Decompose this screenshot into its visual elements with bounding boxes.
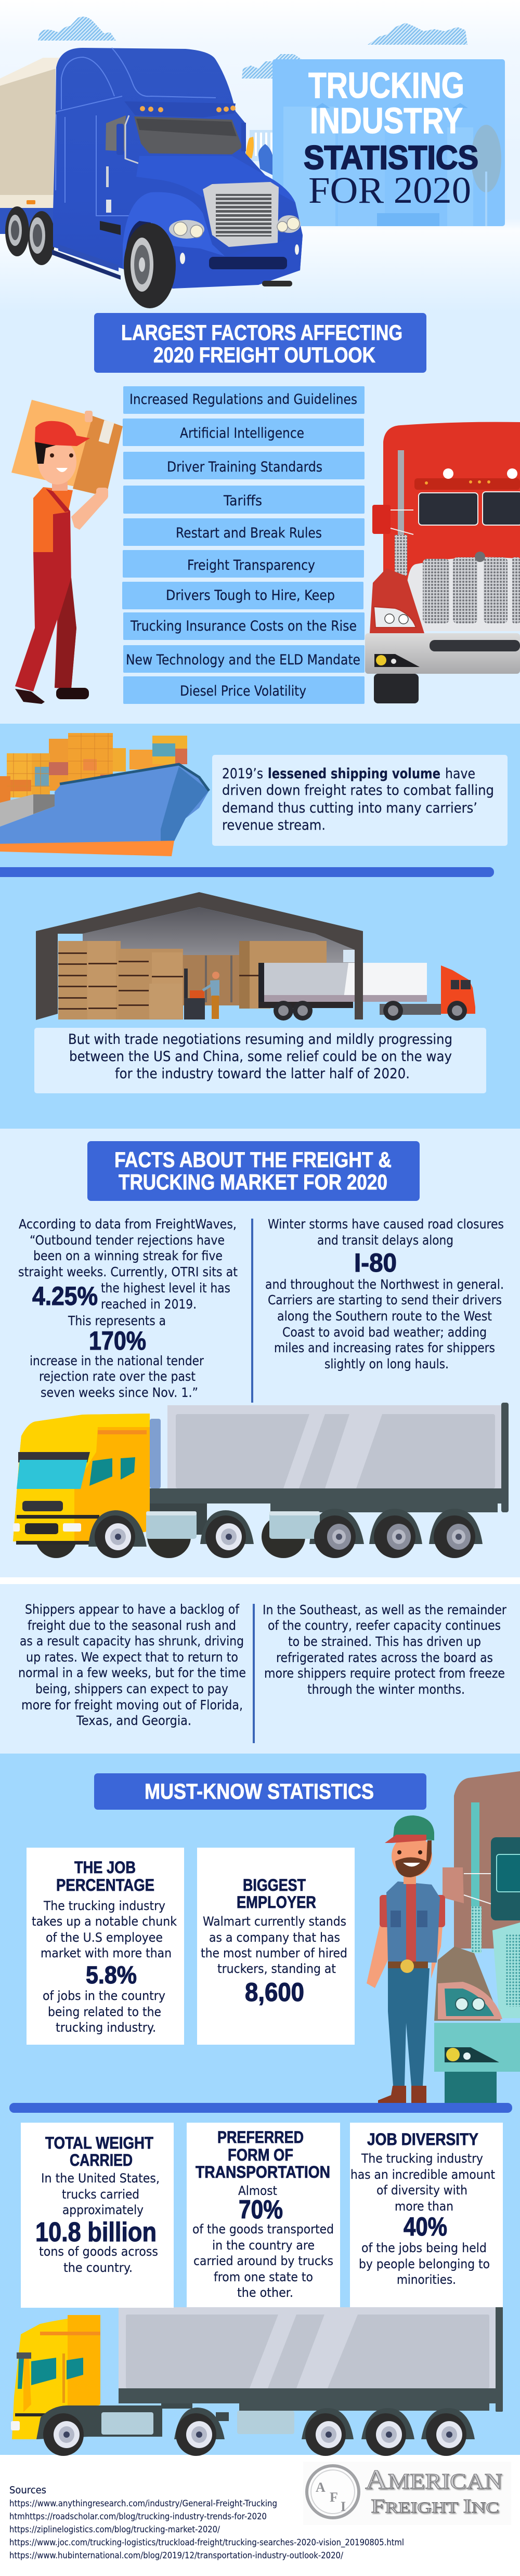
text box: shipping volume: 2019’s	[222, 766, 263, 782]
right column text: southeast: refrigerated rates across the board as	[276, 1650, 493, 1665]
right column text	[265, 1217, 504, 1371]
divider bar	[0, 867, 494, 877]
panel: sources	[9, 2485, 404, 2561]
left column text: 4.25%	[32, 1282, 98, 1311]
list of factors: Trucking Insurance Costs on the Rise	[130, 618, 357, 634]
right column text: along the Southern route to the West	[277, 1309, 492, 1324]
card: biggest employer: BIGGEST	[243, 1876, 306, 1894]
logo: American Freight Inc: FREIGHT INC	[371, 2495, 499, 2517]
trailer	[119, 2305, 503, 2412]
left column text: shippers: Texas, and Georgia.	[76, 1713, 191, 1728]
panel: facts about the market	[13, 1141, 509, 1743]
panel: must-know statistics	[9, 1771, 520, 2456]
card: total weight carried: 10.8 billion	[35, 2217, 157, 2247]
card: biggest employer: 8,600	[245, 1978, 304, 2007]
rear wheels	[5, 206, 55, 265]
card: job diversity: by people belonging to	[359, 2257, 490, 2271]
cab	[11, 2315, 100, 2439]
forklift	[184, 969, 205, 1019]
left column text: shippers: up rates. We expect that to return to	[26, 1650, 238, 1665]
list of factors: Restart and Break Rules	[176, 525, 322, 541]
right column text: Coast to avoid bad weather; adding	[282, 1325, 487, 1340]
left column text: straight weeks. Currently, OTRI sits at	[18, 1264, 238, 1279]
illustration: teal truck	[434, 1771, 520, 2104]
card: preferred form of transportation: the other.	[237, 2285, 293, 2300]
card: preferred form of transportation: PREFERRED	[217, 2128, 304, 2147]
left column text: shippers: more for freight moving out of Florida,	[21, 1697, 243, 1712]
panel: title box	[272, 59, 505, 226]
text box: shipping volume: revenue stream.	[222, 817, 326, 833]
logo ring: I	[341, 2499, 346, 2514]
text box: shipping volume: demand thus cutting into many carriers’	[222, 800, 477, 816]
card: total weight carried: the country.	[63, 2260, 133, 2275]
heading banner: LARGEST FACTORS AFFECTING	[121, 320, 402, 345]
illustration: blue semi truck	[0, 48, 303, 308]
card: biggest employer	[197, 1848, 355, 2045]
list of factors	[122, 386, 365, 704]
card: the job percentage: THE JOB	[74, 1858, 136, 1877]
left column text: reached in 2019.	[101, 1297, 197, 1312]
card: job diversity: The trucking industry	[361, 2151, 483, 2166]
logo: American Freight Inc: AMERICAN	[365, 2465, 502, 2495]
delivery truck	[258, 949, 475, 1021]
panel: sources: https://www.joc.com/trucking-logistics/truckload-freight/trucking-searches-2020-vision_20190805.html	[9, 2538, 404, 2548]
card: total weight carried: TOTAL WEIGHT	[45, 2134, 153, 2152]
card: preferred form of transportation: FORM OF	[228, 2146, 293, 2164]
illustration: warehouse and truck	[36, 892, 475, 1021]
right column text: southeast	[263, 1602, 507, 1697]
card: the job percentage: of jobs in the country	[43, 1989, 165, 2003]
left column text: 170%	[89, 1326, 146, 1355]
panel: largest factors	[11, 313, 520, 704]
card: preferred form of transportation: Almost	[238, 2183, 277, 2198]
left column text	[18, 1217, 238, 1400]
front wheel	[124, 221, 176, 308]
text box: shipping volume: have	[445, 766, 475, 782]
card: preferred form of transportation: in the country are	[212, 2238, 315, 2253]
panel: sources: https://ziplinelogistics.com/blog/trucking-market-2020/	[9, 2525, 220, 2535]
right column text: southeast: through the winter months.	[307, 1682, 465, 1697]
right column text: southeast: to be strained. This has driven up	[288, 1634, 481, 1649]
card: the job percentage: trucking industry.	[56, 2020, 156, 2035]
panel: sources: https://www.anythingresearch.com/industry/General-Freight-Trucking	[9, 2499, 277, 2509]
list of factors: Driver Training Standards	[167, 459, 322, 475]
illustration: faint city behind title	[245, 130, 281, 177]
text box: trade negotiations	[34, 1028, 486, 1093]
left column text: been on a winning streak for five	[33, 1248, 223, 1263]
card: the job percentage: PERCENTAGE	[56, 1876, 154, 1894]
card: biggest employer: the most number of hired	[201, 1946, 347, 1960]
card: job diversity: JOB DIVERSITY	[367, 2130, 478, 2149]
card: total weight carried: In the United States,	[41, 2171, 160, 2186]
card: total weight carried: approximately	[62, 2203, 144, 2217]
illustration: red truck	[365, 422, 520, 703]
panel: sources: htmhttps://roadscholar.com/blog/trucking-industry-trends-for-2020	[9, 2512, 267, 2522]
card: total weight carried: tons of goods across	[39, 2244, 158, 2259]
card: biggest employer: truckers, standing at	[217, 1962, 336, 1976]
card: total weight carried	[21, 2123, 174, 2308]
logo ring	[307, 2466, 359, 2518]
wheel arches	[88, 1509, 483, 1547]
left column text: shippers: as a result capacity has shrunk, driving	[20, 1633, 244, 1649]
text box: trade negotiations: for the industry toward the latter half of 2020.	[115, 1066, 410, 1082]
card: total weight carried: trucks carried	[62, 2187, 139, 2202]
trailer	[150, 1403, 509, 1535]
left column text: According to data from FreightWaves,	[19, 1217, 237, 1232]
text box: trade negotiations: But with trade negotiations resuming and mildly progressing	[68, 1031, 452, 1048]
card: job diversity: of the jobs being held	[361, 2241, 487, 2255]
card: the job percentage: of the U.S employee	[46, 1930, 163, 1945]
list of factors: New Technology and the ELD Mandate	[126, 652, 360, 668]
side window and mirror	[106, 115, 246, 163]
illustration: truck driver	[367, 1815, 445, 2107]
left column text: rejection rate over the past	[39, 1369, 196, 1384]
heading banner	[94, 313, 426, 373]
card: job diversity	[350, 2123, 503, 2307]
list of factors: Drivers Tough to Hire, Keep	[166, 587, 335, 604]
heading banner	[87, 1141, 420, 1201]
card: job diversity: 40%	[404, 2212, 447, 2241]
card: biggest employer: EMPLOYER	[237, 1893, 316, 1912]
left column text: “Outbound tender rejections have	[30, 1233, 225, 1248]
logo ring: F	[330, 2490, 338, 2505]
list of factors: Increased Regulations and Guidelines	[129, 391, 357, 408]
grille	[203, 182, 279, 247]
card: job diversity: has an incredible amount	[350, 2167, 495, 2182]
title text: INDUSTRY	[310, 100, 463, 141]
heading banner: TRUCKING MARKET FOR 2020	[119, 1170, 387, 1194]
list of factors: Freight Transparency	[187, 557, 315, 573]
card: biggest employer: as a company that has	[209, 1930, 340, 1945]
left column text: the highest level it has	[101, 1280, 230, 1296]
text box: shipping volume: lessened shipping volume	[268, 766, 440, 782]
left column text: This represents a	[68, 1313, 166, 1328]
right column text: and transit delays along	[317, 1233, 453, 1248]
panel: sources: Sources	[9, 2485, 46, 2496]
hood	[136, 156, 295, 203]
title text: TRUCKING	[308, 65, 464, 106]
card: the job percentage: being related to the	[48, 2005, 161, 2019]
steps and door handle	[52, 166, 121, 280]
card: job diversity: more than	[395, 2199, 453, 2214]
list of factors: Tariffs	[223, 493, 262, 509]
left column text: increase in the national tender	[30, 1353, 204, 1368]
title text: FOR 2020	[308, 169, 471, 211]
heading banner: FACTS ABOUT THE FREIGHT &	[114, 1147, 392, 1172]
left column text: shippers: being, shippers can expect to pay	[35, 1681, 228, 1696]
card: the job percentage: The trucking industry	[43, 1899, 165, 1913]
undercarriage	[36, 2403, 475, 2439]
heading banner: 2020 FREIGHT OUTLOOK	[153, 343, 375, 367]
text box: shipping volume: driven down freight rates to combat falling	[222, 782, 494, 799]
left column text: shippers: freight due to the seasonal rush and	[28, 1618, 236, 1633]
sun visor with marker lights	[124, 101, 236, 117]
heading banner	[94, 1773, 426, 1810]
card: preferred form of transportation	[187, 2123, 340, 2307]
faint city in title box	[283, 103, 473, 226]
illustration: delivery worker with box	[11, 400, 123, 704]
cab	[13, 1414, 150, 1545]
illustration: yellow truck	[13, 1403, 509, 1558]
right column text: miles and increasing rates for shippers	[274, 1340, 495, 1355]
left column text: shippers	[18, 1602, 246, 1728]
divider bar	[9, 2103, 512, 2113]
title text	[304, 65, 478, 211]
right column text: slightly on long hauls.	[324, 1356, 449, 1371]
text box: trade negotiations: between the US and China, some relief could be on the way	[69, 1049, 452, 1065]
headlights	[159, 215, 301, 239]
right column text: I-80	[354, 1248, 397, 1277]
illustration: container ship	[0, 733, 209, 856]
card: job diversity: of diversity with	[376, 2183, 467, 2198]
hero section	[0, 17, 505, 308]
left column text: seven weeks since Nov. 1.”	[41, 1385, 198, 1400]
card: preferred form of transportation: carried around by trucks	[193, 2254, 333, 2268]
logo: American Freight Inc	[303, 2462, 511, 2525]
icon: cloud behind title	[242, 54, 302, 79]
card: biggest employer: Walmart currently stands	[203, 1914, 346, 1929]
front fender	[123, 192, 234, 289]
card: preferred form of transportation: TRANSPORTATION	[196, 2163, 330, 2181]
trailer	[0, 58, 61, 234]
warehouse worker	[203, 972, 219, 1019]
icon: cloud right	[368, 23, 467, 45]
panel: sources: https://www.hubinternational.com/blog/2019/12/transportation-industry-outlook-2020/	[9, 2551, 343, 2561]
list of factors: Diesel Price Volatility	[180, 683, 306, 699]
panel: shipping and trade	[0, 733, 508, 1093]
wheels	[43, 2413, 466, 2456]
text box: shipping volume	[212, 755, 508, 846]
title text: STATISTICS	[304, 139, 478, 176]
bumper	[156, 235, 303, 289]
logo ring: A	[316, 2480, 326, 2495]
fuel tanks	[146, 1511, 320, 1539]
card: preferred form of transportation: of the goods transported	[192, 2222, 334, 2237]
card: the job percentage: 5.8%	[86, 1961, 137, 1989]
left column text: shippers: Shippers appear to have a backlog of	[25, 1602, 240, 1617]
windshield	[134, 116, 242, 154]
card: the job percentage: takes up a notable chunk	[32, 1914, 177, 1929]
card: job diversity: minorities.	[397, 2272, 456, 2287]
list of factors: Artificial Intelligence	[180, 425, 304, 441]
illustration: yellow truck lower	[11, 2305, 503, 2456]
near side wheels	[95, 1515, 475, 1558]
icon: cloud left	[38, 17, 116, 41]
cab body	[53, 48, 303, 289]
card: the job percentage: market with more than	[41, 1946, 172, 1960]
card: preferred form of transportation: from one state to	[214, 2270, 313, 2284]
far side wheels	[35, 1515, 305, 1558]
heading banner: MUST-KNOW STATISTICS	[145, 1779, 374, 1803]
left column text: shippers: normal in a few weeks, but for the time	[18, 1665, 246, 1680]
card: the job percentage	[27, 1848, 184, 2045]
card: total weight carried: CARRIED	[70, 2151, 133, 2169]
fairing highlight lines	[56, 48, 216, 216]
icon: tree	[471, 125, 501, 226]
card: preferred form of transportation: 70%	[239, 2195, 283, 2224]
